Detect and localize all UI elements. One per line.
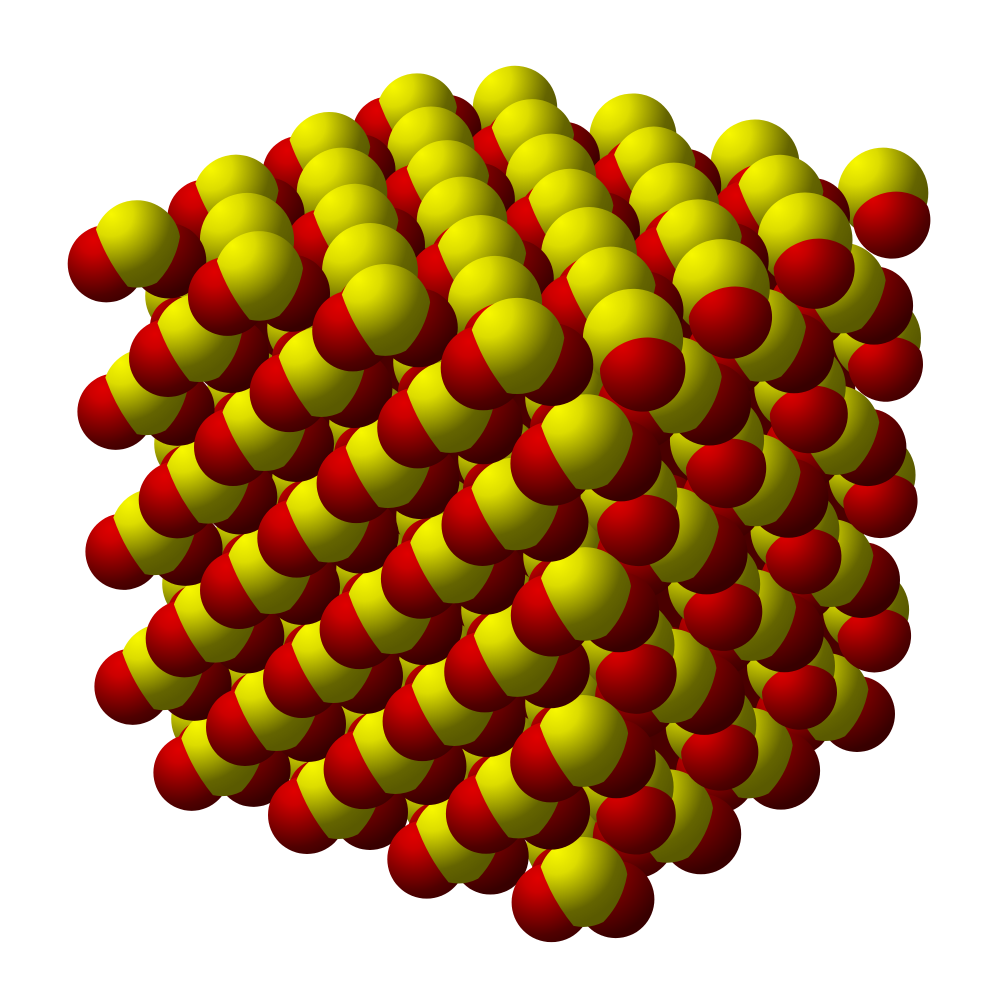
right face: bottom tier <box>580 567 911 879</box>
crystal interior: dark fill behind the molecules <box>215 160 870 840</box>
right face: upper tier <box>597 242 913 450</box>
left face: row 2 <box>129 294 662 506</box>
left face: row 7 <box>94 624 590 854</box>
left face: row 6 <box>146 575 656 802</box>
left face: row 4 <box>139 436 659 657</box>
left face: row 8 <box>153 710 654 942</box>
left face: row 5 <box>85 489 590 712</box>
right face: second tier <box>581 294 923 599</box>
left face: row 3 <box>77 349 589 566</box>
deep layer: molecules behind the left face <box>145 254 702 905</box>
top face: molecules back to front <box>68 66 930 412</box>
right face: third tier <box>579 431 918 739</box>
